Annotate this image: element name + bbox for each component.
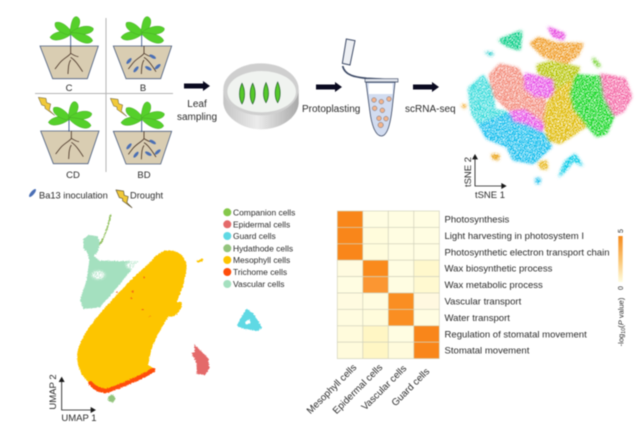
legend: cell types: Trichome cells	[233, 267, 287, 277]
arrow: to protoplasting	[316, 82, 342, 92]
colour scale: P value)	[616, 298, 626, 325]
heatmap column labels: Mesophyll cells	[305, 362, 359, 417]
cluster: hydathode cells	[108, 395, 115, 402]
label: leaf sampling: Leaf	[187, 99, 207, 110]
colour scale: 0	[618, 286, 625, 290]
heatmap row labels	[444, 214, 610, 357]
speckle: sparse vascular centre	[92, 262, 140, 278]
chart: tSNE clusters	[461, 27, 632, 201]
label: BD: BD	[137, 170, 151, 181]
heatmap column labels: Epidermal cells	[331, 362, 385, 417]
colour scale: 10	[621, 328, 627, 334]
heatmap cells	[337, 211, 439, 359]
panel: treatment groups	[35, 17, 173, 181]
heatmap row labels: Vascular transport	[444, 296, 522, 308]
label: tSNE 2: tSNE 2	[463, 157, 474, 187]
cluster: mesophyll cells	[77, 250, 187, 391]
colour scale: 5	[618, 229, 625, 233]
pot CD	[41, 102, 99, 164]
cluster: vascular cells	[80, 214, 138, 309]
icon: microcentrifuge tube	[342, 39, 398, 136]
label: UMAP 2: UMAP 2	[48, 374, 59, 410]
legend: cell types: Companion cells	[233, 207, 295, 217]
legend: cell types: Vascular cells	[233, 279, 284, 289]
legend: cell types: Epidermal cells	[233, 219, 290, 229]
pot C	[40, 17, 98, 79]
cluster: guard cells	[237, 309, 262, 331]
heatmap column labels	[305, 362, 432, 417]
pot BD	[113, 102, 172, 164]
icon: drought CD	[38, 97, 55, 115]
icon: petri dish	[223, 63, 299, 129]
icon: drought BD	[110, 98, 127, 116]
arrow: to scRNA-seq	[413, 82, 439, 92]
label: UMAP 1: UMAP 1	[61, 413, 97, 424]
heatmap row labels: Wax metabolic process	[444, 280, 543, 291]
cluster: epidermal cells	[192, 344, 209, 375]
cluster: trichome cells	[91, 370, 153, 391]
pot B	[113, 17, 172, 79]
heatmap row labels: Stomatal movement	[444, 346, 530, 357]
heatmap row labels: Regulation of stomatal movement	[444, 329, 587, 340]
legend: cell types: Guard cells	[233, 231, 276, 241]
heatmap row labels: Photosynthetic electron transport chain	[444, 247, 610, 258]
legend: cell types	[223, 207, 295, 289]
legend: inoculation and drought	[28, 188, 163, 208]
colour scale	[616, 229, 627, 346]
axes: UMAP	[59, 377, 96, 413]
label: tSNE 1: tSNE 1	[475, 190, 505, 201]
heatmap row labels: Photosynthesis	[444, 214, 509, 226]
legend: cell types: Mesophyll cells	[233, 255, 290, 265]
label: scRNA-seq: scRNA-seq	[405, 104, 456, 115]
heatmap column labels: Vascular cells	[360, 363, 409, 413]
heatmap row labels: Wax biosynthetic process	[444, 264, 553, 275]
label: C: C	[66, 83, 73, 94]
axes: tSNE	[472, 154, 507, 189]
legend: cell types: Hydathode cells	[233, 243, 293, 253]
heatmap column labels: Guard cells	[390, 366, 432, 409]
label: leaf sampling: sampling	[177, 112, 217, 123]
chart: UMAP clusters	[48, 214, 262, 424]
heatmap row labels: Water transport	[444, 313, 510, 324]
colour scale: (	[616, 325, 626, 328]
label: CD: CD	[66, 170, 80, 181]
colour scale: -log	[616, 334, 626, 346]
heatmap row labels: Light harvesting in photosystem I	[444, 231, 584, 242]
label: B: B	[140, 83, 146, 94]
arrow: to leaf sampling	[184, 81, 210, 91]
chart: enrichment heatmap	[305, 211, 610, 417]
label: protoplasting: Protoplasting	[302, 104, 360, 115]
legend: inoculation and drought: Drought	[130, 190, 163, 200]
legend: inoculation and drought: Ba13 inoculation	[39, 190, 108, 200]
